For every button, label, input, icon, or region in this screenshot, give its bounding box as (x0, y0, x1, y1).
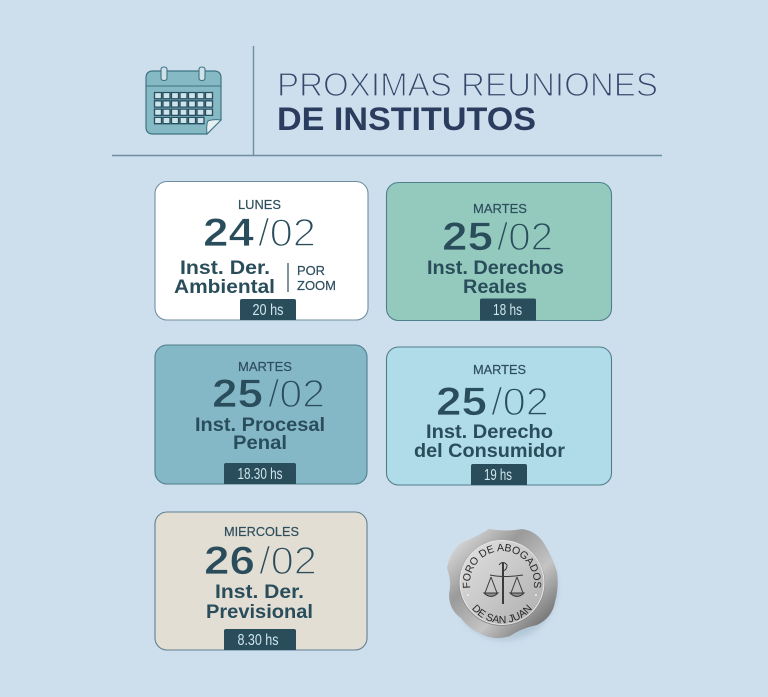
institute name: Inst. Procesal (195, 415, 325, 436)
time tag (224, 629, 296, 650)
panel: card Instituto Derecho Previsional (155, 512, 367, 650)
institute name (427, 258, 564, 298)
time tag (224, 463, 296, 484)
weekday: MARTES (473, 202, 527, 216)
title (277, 66, 658, 137)
panel: card Instituto Derecho del Consumidor (386, 347, 612, 485)
title: PROXIMAS REUNIONES (277, 66, 658, 103)
institute name: Ambiental (174, 277, 275, 298)
time tag (480, 298, 536, 320)
institute name: Inst. Der. (215, 582, 304, 603)
time tag: 19 hs (484, 467, 512, 484)
weekday: MARTES (238, 360, 292, 374)
date: 25 (442, 215, 493, 259)
date: /02 (491, 381, 549, 424)
seal inscription: FORO DE ABOGADOS (462, 544, 542, 588)
seal inscription: DE SAN JUAN (472, 604, 532, 624)
icon: wax seal Foro de Abogados de San Juan (447, 529, 558, 641)
institute name: Reales (463, 277, 527, 298)
date (436, 380, 549, 424)
institute name: Inst. Derechos (427, 258, 564, 279)
time tag (471, 464, 527, 485)
icon: scales and sword (467, 562, 537, 604)
institute name (195, 415, 325, 454)
institute name: Previsional (206, 602, 313, 623)
time tag: 18 hs (493, 302, 522, 319)
modality note: ZOOM (297, 279, 336, 293)
date (212, 372, 325, 416)
title: DE INSTITUTOS (277, 101, 536, 137)
institute name: Inst. Derecho (426, 422, 553, 443)
institute name (174, 258, 275, 298)
time tag (240, 299, 296, 320)
modality note (288, 263, 336, 293)
institute name (414, 422, 566, 462)
date: /02 (258, 212, 316, 255)
weekday: MIERCOLES (224, 525, 299, 539)
panel: card Instituto Derecho Ambiental (155, 182, 368, 320)
date (204, 539, 317, 583)
seal inscription (462, 544, 542, 624)
panel: card Instituto Procesal Penal (155, 345, 367, 484)
date: /02 (259, 540, 317, 583)
panel: card Instituto Derechos Reales (386, 182, 612, 320)
date: 25 (436, 380, 487, 424)
weekday: MARTES (473, 363, 526, 377)
date (203, 211, 316, 255)
date: 24 (203, 211, 255, 255)
institute name (206, 582, 313, 623)
institute name: del Consumidor (414, 441, 566, 462)
time tag: 18.30 hs (238, 466, 282, 483)
date: /02 (497, 216, 553, 259)
time tag: 8.30 hs (238, 632, 278, 649)
institute name: Inst. Der. (180, 258, 270, 279)
date (442, 215, 553, 259)
date: /02 (268, 373, 325, 416)
weekday: LUNES (238, 198, 281, 212)
modality note: POR (297, 264, 325, 278)
icon: calendar (146, 67, 221, 134)
institute name: Penal (233, 433, 287, 454)
date: 26 (204, 539, 255, 583)
date: 25 (212, 372, 263, 416)
time tag: 20 hs (252, 302, 284, 319)
